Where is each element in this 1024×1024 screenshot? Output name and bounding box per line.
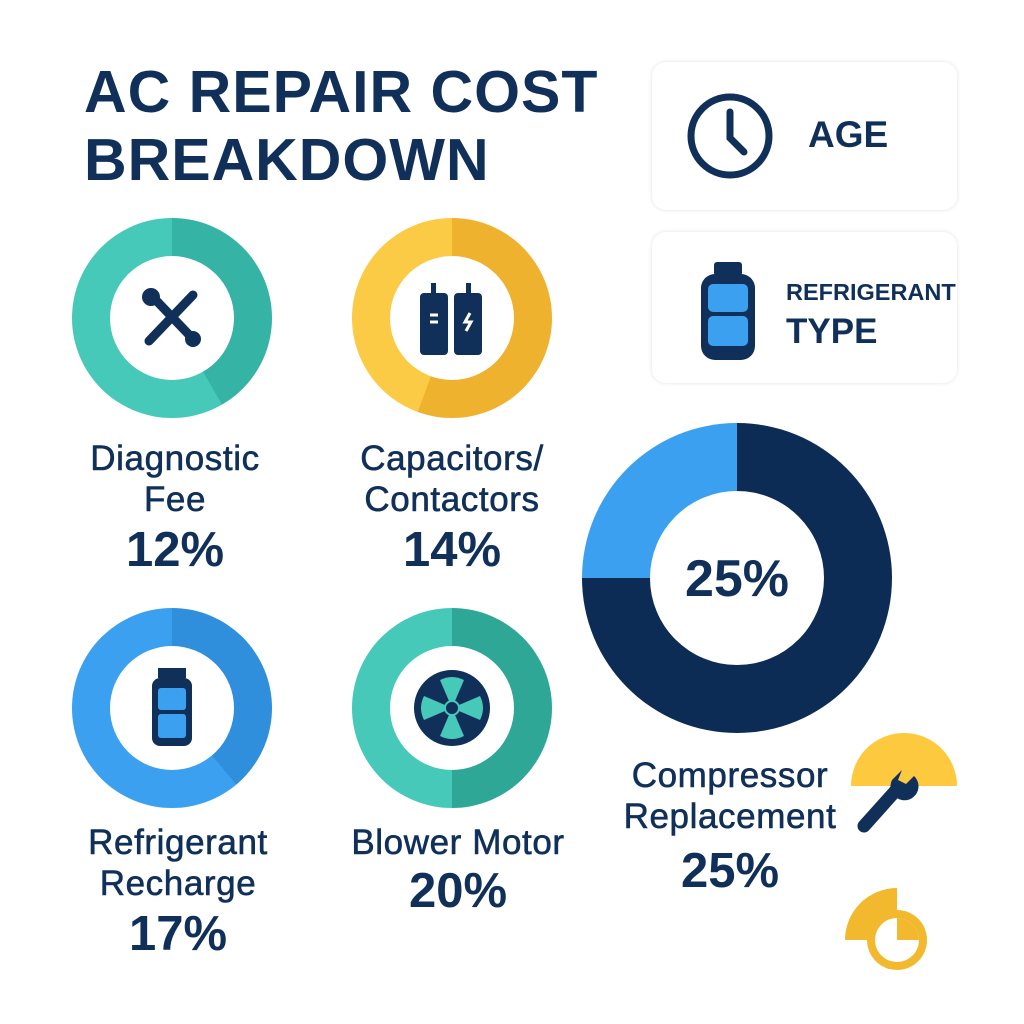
icon: tank <box>701 262 755 360</box>
title: BREAKDOWN <box>84 127 490 193</box>
label: diagnostic: Diagnostic <box>90 439 260 478</box>
label: capacitors: Contactors <box>364 480 540 519</box>
text: donut center: 25% <box>685 550 789 608</box>
donut: refrigerant <box>72 608 272 808</box>
text: age: AGE <box>808 114 888 155</box>
label: refrigerant: 17% <box>129 907 227 961</box>
label: capacitors <box>360 439 544 577</box>
label: capacitors: 14% <box>403 523 501 577</box>
label: diagnostic: Fee <box>144 480 206 519</box>
label: compressor <box>624 756 836 898</box>
title: AC REPAIR COST <box>84 59 598 125</box>
icon: capacitors <box>420 283 482 355</box>
icon: bottle <box>152 668 192 746</box>
text: refrigerant type: TYPE <box>786 312 877 351</box>
label: refrigerant <box>88 823 268 961</box>
label: blower: Blower Motor <box>351 823 565 862</box>
label: refrigerant: Recharge <box>100 864 256 903</box>
label: blower <box>351 823 565 918</box>
donut: blower <box>352 608 552 808</box>
donut: diagnostic <box>72 218 272 418</box>
icon: clock <box>688 94 772 178</box>
label: diagnostic <box>90 439 260 577</box>
text: refrigerant type <box>786 279 956 351</box>
icon: yellow pie <box>845 888 927 970</box>
icon: fan <box>414 670 490 746</box>
donut: compressor <box>582 423 892 733</box>
icon: tools <box>142 288 201 347</box>
label: compressor: Replacement <box>624 797 836 836</box>
donut: capacitors <box>352 218 552 418</box>
card: age <box>652 62 957 210</box>
label: compressor: Compressor <box>632 756 828 795</box>
card: refrigerant type <box>652 232 957 383</box>
label: refrigerant: Refrigerant <box>88 823 268 862</box>
label: blower: 20% <box>409 864 507 918</box>
label: diagnostic: 12% <box>126 523 224 577</box>
label: capacitors: Capacitors/ <box>360 439 544 478</box>
title <box>84 59 598 193</box>
icon: half gauge with wrench <box>851 733 957 832</box>
label: compressor: 25% <box>681 844 779 898</box>
text: refrigerant type: REFRIGERANT <box>786 279 956 305</box>
